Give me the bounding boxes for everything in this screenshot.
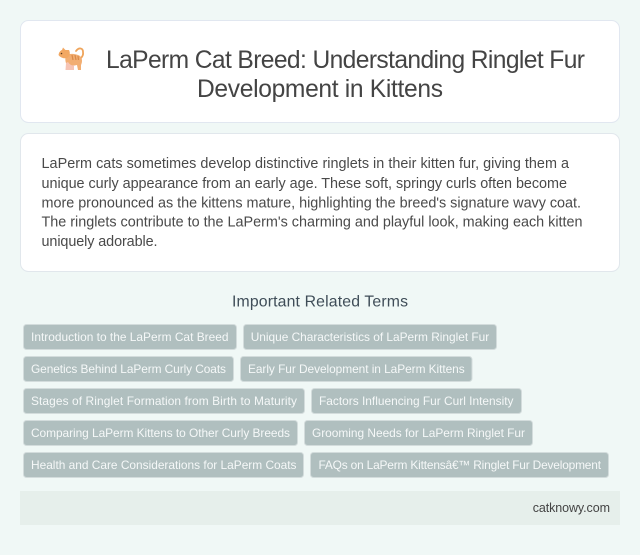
tag: stages of ringlet formation: Stages of Ringlet Formation from Birth to Maturity bbox=[31, 394, 297, 408]
text block: description: more pronounced as the kittens mature, highlighting the breed's signature wavy coat. bbox=[42, 196, 581, 212]
tag: grooming needs: Grooming Needs for LaPerm Ringlet Fur bbox=[312, 426, 525, 440]
tag: early fur development: Early Fur Development in LaPerm Kittens bbox=[248, 362, 465, 376]
title: LaPerm Cat Breed: Understanding Ringlet Fur bbox=[106, 47, 585, 74]
tag: unique characteristics bbox=[244, 324, 496, 350]
text block: description bbox=[42, 156, 582, 250]
tag: factors influencing curl bbox=[312, 388, 522, 414]
tag: early fur development bbox=[240, 356, 472, 382]
text block: description: LaPerm cats sometimes develop distinctive ringlets in their kitten fur, giving them a bbox=[42, 156, 569, 172]
tag: grooming needs bbox=[304, 420, 532, 446]
tag: faqs: FAQs on LaPerm Kittensâ€™ Ringlet Fur Development bbox=[318, 458, 602, 472]
icon: cat bbox=[58, 48, 83, 70]
panel: related term tags bbox=[24, 324, 608, 478]
tag: comparing breeds: Comparing LaPerm Kittens to Other Curly Breeds bbox=[31, 426, 290, 440]
tag: introduction: Introduction to the LaPerm Cat Breed bbox=[31, 330, 228, 344]
text block: description: unique curly appearance from an early age. These soft, springy curls often become bbox=[42, 176, 567, 192]
tag: faqs bbox=[310, 452, 608, 478]
panel: description card bbox=[20, 134, 620, 272]
footer: catknowy.com bbox=[533, 501, 610, 515]
tag: factors influencing curl: Factors Influencing Fur Curl Intensity bbox=[319, 394, 514, 408]
text block: description: The ringlets contribute to the LaPerm's charming and playful look, making each kitten bbox=[42, 215, 582, 231]
tag: stages of ringlet formation bbox=[24, 388, 304, 414]
tag: health and care bbox=[24, 452, 304, 478]
title bbox=[106, 47, 585, 103]
heading: related terms: Important Related Terms bbox=[232, 294, 408, 311]
tag: health and care: Health and Care Considerations for LaPerm Coats bbox=[31, 458, 297, 472]
footer bbox=[20, 491, 620, 525]
panel: header card bbox=[20, 20, 620, 122]
tag: comparing breeds bbox=[24, 420, 298, 446]
title: Development in Kittens bbox=[197, 76, 443, 103]
tag: genetics: Genetics Behind LaPerm Curly Coats bbox=[31, 362, 226, 376]
tag: genetics bbox=[24, 356, 234, 382]
text block: description: uniquely adorable. bbox=[42, 234, 158, 250]
tag: unique characteristics: Unique Characteristics of LaPerm Ringlet Fur bbox=[251, 330, 489, 344]
tag: introduction bbox=[24, 324, 236, 350]
